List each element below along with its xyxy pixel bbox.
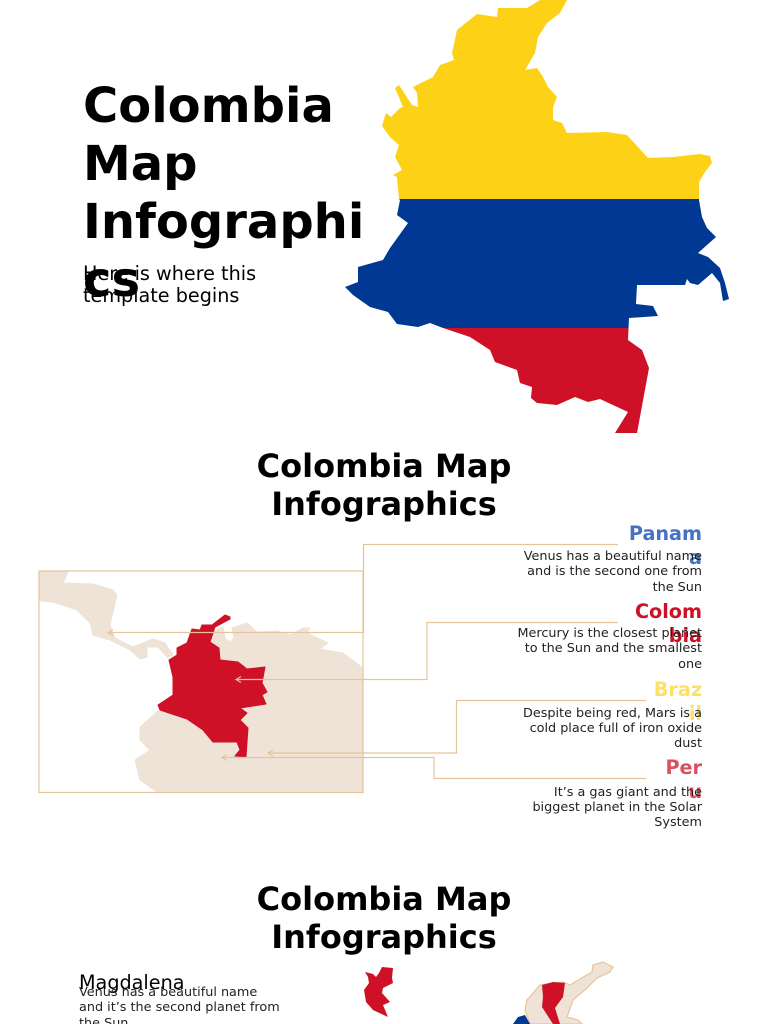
text: Panama description: and is the second one from — [527, 564, 702, 579]
panel: country map section — [38, 447, 702, 830]
region: Magdalena — [542, 982, 565, 1024]
map: Magdalena region — [364, 967, 393, 1017]
connector: Colombia — [236, 622, 618, 682]
text: Panama description: the Sun — [653, 580, 702, 595]
text: Colombia description: one — [678, 657, 702, 672]
text: Peru description — [532, 784, 702, 830]
text: Brazil description: Despite being red, Mars is a — [523, 706, 702, 720]
connector: Panama — [108, 544, 618, 636]
panel: hero — [83, 0, 729, 433]
text: Colombia description: to the Sun and the smallest — [525, 641, 702, 656]
connector: Peru — [222, 754, 646, 778]
heading: Infographics — [271, 485, 497, 523]
text: Panama description: Venus has a beautiful name — [524, 549, 702, 564]
title: Colombia Map Infographics — [83, 78, 364, 308]
text: Colombia description: Mercury is the closest planet — [517, 626, 702, 641]
text: Colombia description — [517, 626, 702, 672]
subtitle: Here is where this — [83, 262, 256, 285]
map: Central America — [40, 572, 173, 659]
text: Brazil description: dust — [674, 736, 702, 751]
heading — [257, 447, 511, 523]
label: Magdalena: Magdalena — [79, 971, 184, 994]
label: Colombia: Colombia — [635, 600, 702, 647]
subtitle: template begins — [83, 284, 239, 307]
text: Magdalena description — [79, 985, 280, 1024]
text: Panama description — [524, 549, 702, 595]
heading — [257, 880, 511, 956]
map: Colombia regions — [513, 961, 614, 1024]
label: Panama: Panama — [629, 522, 702, 569]
heading: Infographics — [271, 918, 497, 956]
region: Pacific blue — [513, 1015, 530, 1024]
text: Peru description: System — [654, 815, 702, 830]
map with connectors — [38, 544, 646, 794]
connector: Brazil — [268, 700, 646, 756]
text: Magdalena description: and it’s the second planet from — [79, 1000, 280, 1015]
map: South America — [135, 623, 363, 792]
region: northern coast — [525, 962, 613, 1024]
map: Colombia highlighted — [158, 615, 267, 757]
label: Peru: Peru — [665, 756, 702, 803]
text: Brazil description — [523, 706, 702, 751]
label: Brazil: Brazil — [654, 678, 702, 725]
text: Peru description: It’s a gas giant and the — [554, 784, 702, 800]
heading: Colombia Map — [257, 880, 511, 918]
heading: Colombia Map — [257, 447, 511, 485]
map frame — [39, 571, 363, 792]
subtitle — [83, 262, 256, 307]
text: Magdalena description: Venus has a beautiful name — [79, 985, 257, 1000]
panel: regions section — [79, 880, 614, 1024]
text: Peru description: biggest planet in the Solar — [532, 800, 702, 815]
text: Brazil description: cold place full of iron oxide — [530, 721, 702, 736]
map: Colombia flag — [345, 0, 729, 433]
